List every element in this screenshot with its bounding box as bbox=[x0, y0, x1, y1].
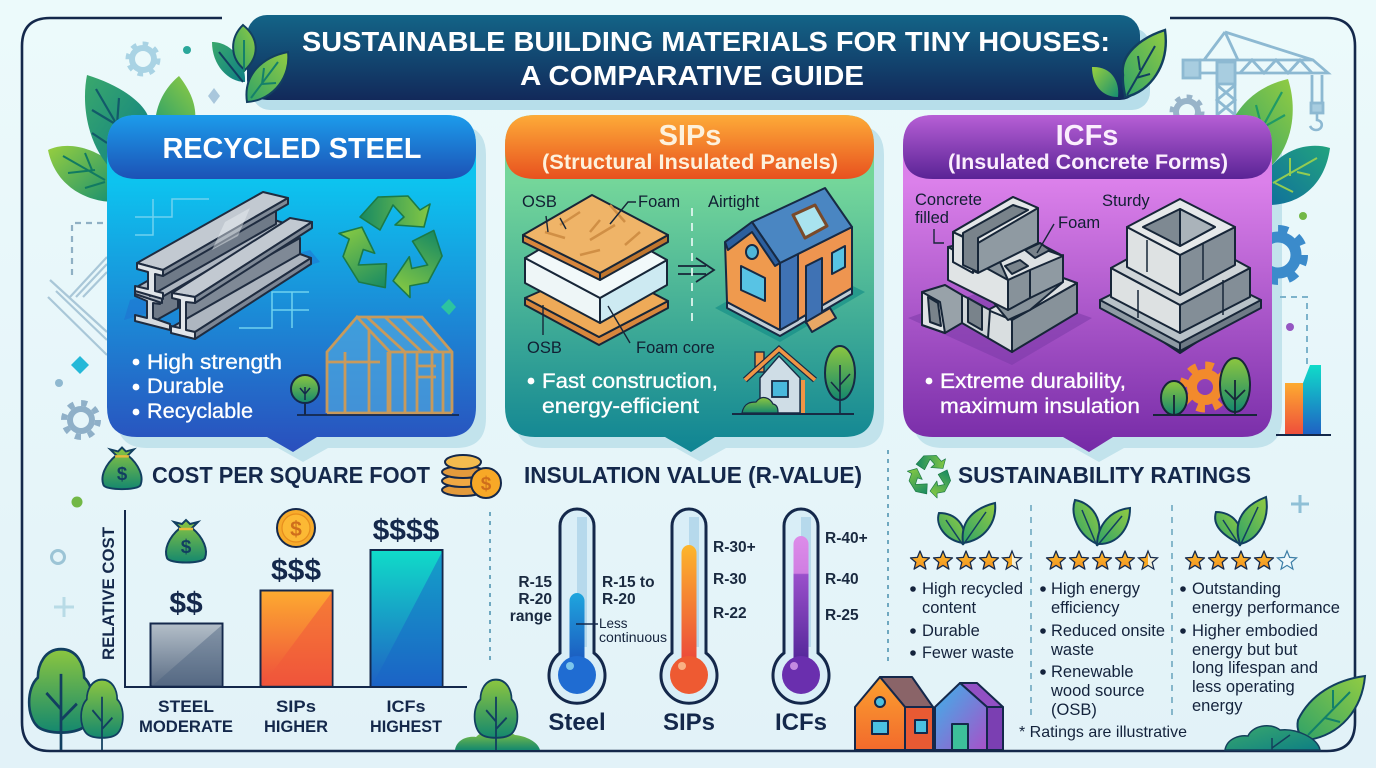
labels: SIP layers bbox=[522, 193, 715, 357]
list column 1: content bbox=[922, 599, 977, 617]
list column 1: Fewer waste bbox=[922, 644, 1014, 662]
category labels: SIPs bbox=[276, 697, 316, 716]
heading: ICFs bbox=[948, 120, 1228, 174]
illustration: purple house bbox=[935, 683, 1003, 750]
decoration: upper right gear bbox=[1172, 97, 1202, 127]
decoration: right gear bbox=[1252, 229, 1304, 281]
title text: SUSTAINABLE BUILDING MATERIALS FOR TINY HOUSES: bbox=[302, 26, 1110, 57]
list column 2: Renewable bbox=[1051, 663, 1134, 681]
bar chart bbox=[125, 509, 467, 736]
sparkle bbox=[441, 299, 456, 315]
stars column 3 bbox=[1186, 551, 1296, 569]
list column 3: Outstanding bbox=[1192, 580, 1281, 598]
values bbox=[169, 514, 440, 620]
labels: ICF left: Concrete bbox=[915, 191, 982, 209]
panel: ICFs bbox=[903, 115, 1272, 452]
bar: steel bbox=[150, 624, 222, 686]
panel: recycled steel bbox=[107, 115, 476, 452]
dashed divider bbox=[691, 208, 693, 326]
list column 2: waste bbox=[1050, 641, 1094, 659]
bullet list: steel bbox=[133, 351, 282, 423]
decoration: left diamond and circle and plus bbox=[52, 356, 89, 617]
labels: steel R-values: continuous bbox=[599, 630, 667, 645]
tree and bush bottom center bbox=[455, 680, 540, 750]
list column 2: (OSB) bbox=[1051, 701, 1097, 719]
list column 3 bbox=[1180, 580, 1340, 715]
category labels: HIGHER bbox=[264, 717, 328, 736]
heading: sustainability: SUSTAINABILITY RATINGS bbox=[958, 462, 1251, 488]
section: cost per square foot bbox=[100, 448, 501, 736]
title right leaves bbox=[1092, 30, 1166, 97]
list column 3: Higher embodied bbox=[1192, 622, 1318, 640]
labels: steel R-values: R-15 to bbox=[602, 574, 655, 591]
icon: money bag heading bbox=[102, 448, 142, 489]
list column 2: Reduced onsite bbox=[1051, 622, 1165, 640]
icon: steel I-beams bbox=[124, 192, 320, 339]
plus decoration bbox=[1291, 495, 1309, 513]
icon: coin: $ bbox=[290, 518, 302, 541]
label: ICFs: ICFs bbox=[775, 709, 827, 736]
category labels: MODERATE bbox=[139, 717, 233, 736]
category labels: HIGHEST bbox=[370, 717, 443, 736]
decoration: left gear bbox=[128, 44, 158, 74]
blueprint lines bbox=[135, 199, 209, 235]
panel shadows bbox=[117, 125, 1282, 462]
icon: coins: $ bbox=[481, 474, 492, 495]
list column 3: long lifespan and bbox=[1192, 659, 1318, 677]
labels: SIPs R-values bbox=[713, 539, 756, 622]
bullet list: steel: High strength bbox=[147, 351, 282, 374]
bullet list: steel: Recyclable bbox=[147, 400, 253, 423]
label: airtight: Airtight bbox=[708, 193, 760, 211]
header: SIPs bbox=[505, 115, 874, 179]
illustration: gear and trees bbox=[1153, 358, 1257, 415]
trees bottom left bbox=[29, 649, 123, 750]
icon: recycle bbox=[904, 455, 955, 500]
leaf icon column 2 bbox=[1074, 500, 1130, 546]
decoration: sparkles top left bbox=[183, 46, 220, 104]
labels: ICFs R-values: R-40+ bbox=[825, 530, 868, 547]
labels: SIP layers: OSB bbox=[527, 339, 562, 357]
title left leaves bbox=[212, 25, 288, 102]
list column 1 bbox=[910, 580, 1023, 662]
heading: ICFs: ICFs bbox=[1056, 120, 1118, 152]
category labels: STEEL bbox=[158, 697, 214, 716]
illustration: bottom right leaf and bush bbox=[1225, 676, 1365, 750]
list column 3: energy bbox=[1192, 697, 1243, 715]
labels: steel R-values: R-20 bbox=[518, 591, 552, 608]
labels: ICFs R-values: R-40 bbox=[825, 571, 859, 588]
labels: steel R-values: R-15 bbox=[518, 574, 552, 591]
bullet text: ICFs bbox=[926, 370, 1140, 418]
thermometer: SIPs bbox=[661, 509, 717, 703]
label: sturdy: Sturdy bbox=[1102, 192, 1150, 210]
heading: recycled steel: RECYCLED STEEL bbox=[162, 133, 422, 165]
bullet text: SIPs bbox=[528, 370, 718, 418]
title banner bbox=[212, 15, 1166, 110]
bullet text: ICFs: Extreme durability, bbox=[940, 370, 1126, 393]
labels: SIP layers: OSB bbox=[522, 193, 557, 211]
illustration: small house and tree bbox=[732, 346, 855, 414]
footnote: * Ratings are illustrative bbox=[1019, 724, 1187, 741]
thermometer: ICFs bbox=[773, 509, 829, 703]
heading: SIPs: (Structural Insulated Panels) bbox=[542, 151, 838, 174]
panel: SIPs bbox=[505, 115, 874, 452]
labels: ICF left: Foam bbox=[1058, 214, 1100, 232]
leaf icon column 3 bbox=[1215, 497, 1267, 546]
heading: ICFs: (Insulated Concrete Forms) bbox=[948, 151, 1228, 174]
heading: cost: COST PER SQUARE FOOT bbox=[152, 462, 430, 488]
stars column 2 bbox=[1046, 551, 1158, 569]
values: $$ bbox=[169, 587, 203, 620]
labels: steel R-values bbox=[510, 574, 667, 645]
section: insulation value bbox=[510, 462, 868, 736]
bar: ICFs bbox=[370, 550, 442, 687]
list column 3: energy but but bbox=[1192, 641, 1298, 659]
labels: steel R-values: R-20 bbox=[602, 591, 636, 608]
bullet list: steel: Durable bbox=[147, 375, 224, 398]
list column 1: Durable bbox=[922, 622, 980, 640]
bullet text: SIPs: energy-efficient bbox=[542, 395, 699, 418]
stars column 1 bbox=[910, 551, 1022, 569]
label: SIPs: SIPs bbox=[663, 709, 715, 736]
labels: ICFs R-values: R-25 bbox=[825, 607, 859, 624]
labels: SIP layers: Foam core bbox=[636, 339, 715, 357]
dotted divider left bbox=[489, 512, 491, 662]
labels: steel R-values: Less bbox=[599, 616, 628, 631]
decoration: right dots and dashed connector bbox=[1280, 212, 1307, 365]
heading: insulation: INSULATION VALUE (R-VALUE) bbox=[524, 462, 862, 488]
labels: ICF left bbox=[915, 191, 1100, 253]
heading: SIPs: SIPs bbox=[659, 120, 721, 152]
list column 2: efficiency bbox=[1051, 599, 1120, 617]
decoration: top left leaves bbox=[48, 75, 195, 202]
decoration: mini bar chart bbox=[1276, 365, 1331, 435]
list column 1: High recycled bbox=[922, 580, 1023, 598]
illustration: tiny house bbox=[715, 188, 865, 342]
decoration: blueprint lines left bbox=[48, 223, 107, 355]
category labels bbox=[139, 697, 443, 736]
icon: house frame bbox=[291, 317, 459, 415]
category labels: ICFs bbox=[386, 697, 426, 716]
diagram: sturdy block bbox=[1100, 199, 1261, 353]
heading: SIPs bbox=[542, 120, 838, 174]
labels: steel R-values: range bbox=[510, 608, 552, 625]
icon: coin bbox=[277, 509, 315, 547]
labels: ICF left: filled bbox=[915, 209, 949, 227]
diagram: concrete filled blocks bbox=[908, 197, 1092, 365]
values: $$$ bbox=[271, 554, 321, 587]
axis label: RELATIVE COST bbox=[100, 527, 118, 660]
list column 2: High energy bbox=[1051, 580, 1141, 598]
leaf icon column 1 bbox=[938, 503, 995, 545]
header: ICFs bbox=[903, 115, 1272, 179]
bullet text: SIPs: Fast construction, bbox=[542, 370, 718, 393]
labels: ICFs R-values bbox=[825, 530, 868, 624]
thermometer: steel bbox=[549, 509, 605, 703]
icon: recycle arrows bbox=[332, 196, 452, 302]
dividers bbox=[1031, 505, 1172, 715]
list column 2: wood source bbox=[1050, 682, 1145, 700]
title text: A COMPARATIVE GUIDE bbox=[520, 60, 864, 91]
labels: SIPs R-values: R-30 bbox=[713, 571, 747, 588]
values: $$$$ bbox=[373, 514, 440, 547]
decoration: crane bbox=[1183, 32, 1328, 130]
arrow bbox=[678, 258, 714, 282]
list column 3: less operating bbox=[1192, 678, 1295, 696]
diagram: SIP layers bbox=[523, 195, 668, 345]
decoration: right leaves bbox=[1230, 79, 1330, 205]
icon: coins bbox=[442, 455, 501, 498]
icon: small tree bbox=[291, 375, 319, 415]
labels: SIP layers: Foam bbox=[638, 193, 680, 211]
dotted divider right bbox=[887, 450, 889, 662]
header: recycled steel bbox=[107, 115, 476, 179]
list column 2 bbox=[1040, 580, 1165, 719]
label: steel: Steel bbox=[548, 709, 606, 736]
labels: SIPs R-values: R-30+ bbox=[713, 539, 756, 556]
title text bbox=[302, 26, 1110, 91]
blueprint lines lower bbox=[239, 292, 309, 328]
bullet text: ICFs: maximum insulation bbox=[940, 395, 1140, 418]
list column 3: energy performance bbox=[1192, 599, 1340, 617]
labels: SIPs R-values: R-22 bbox=[713, 605, 747, 622]
bar: SIPs bbox=[260, 590, 332, 686]
section: sustainability ratings bbox=[904, 455, 1340, 741]
decoration: lower left gear bbox=[64, 403, 98, 437]
icon: money bag bbox=[166, 520, 206, 562]
illustration: orange house bbox=[855, 677, 933, 750]
